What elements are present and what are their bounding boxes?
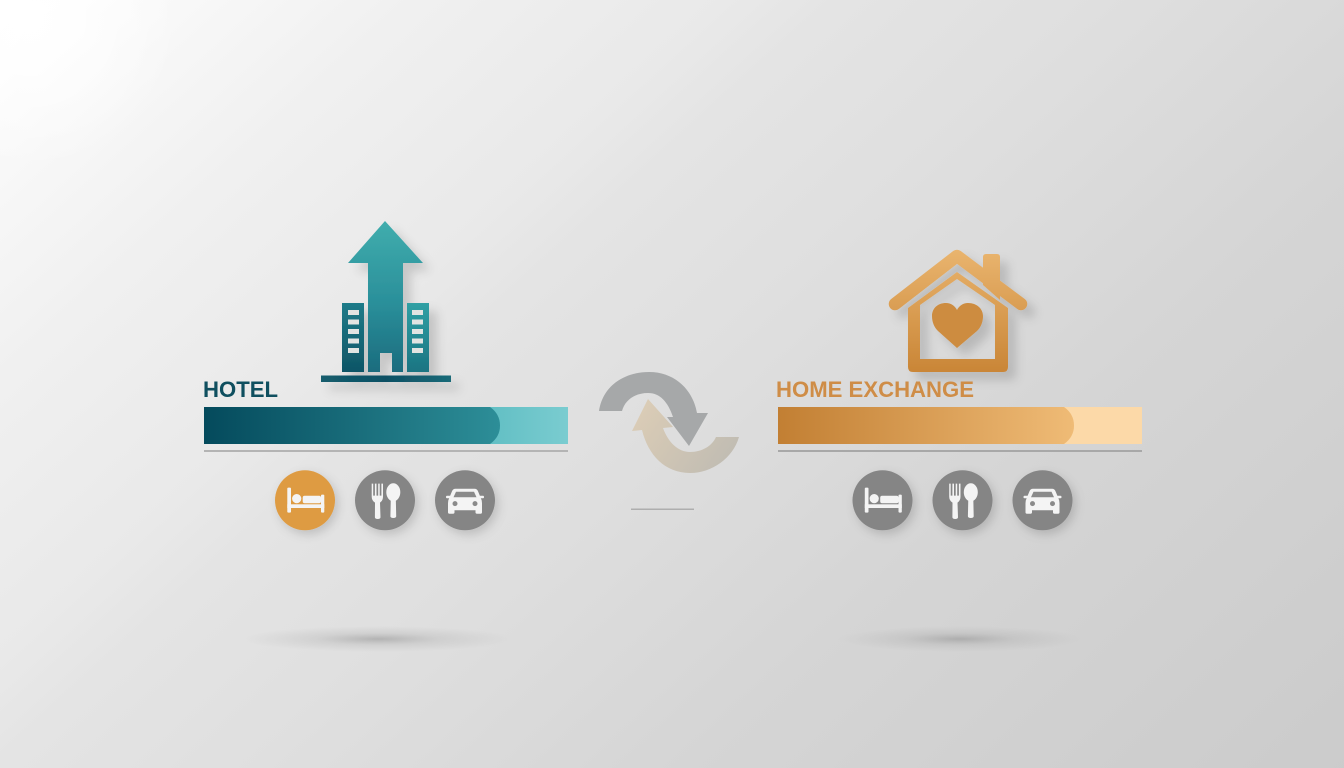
icon part: left building xyxy=(342,303,364,372)
icon: car xyxy=(1012,470,1072,530)
divider: hotel xyxy=(204,450,568,452)
divider: home exchange xyxy=(778,450,1142,452)
heading: home exchange: HOME EXCHANGE xyxy=(776,377,974,402)
icons: home exchange services xyxy=(852,470,1072,530)
icon: house with heart xyxy=(895,254,1021,372)
icon: fork and spoon xyxy=(932,470,992,530)
panel: hotel xyxy=(203,221,568,530)
bar: hotel xyxy=(204,407,568,444)
icon: car xyxy=(435,470,495,530)
ground shadow: home exchange xyxy=(838,626,1082,652)
icon: fork and spoon xyxy=(355,470,415,530)
exchange arrows xyxy=(599,372,739,473)
icons: hotel services xyxy=(275,470,495,530)
bar: home exchange xyxy=(778,407,1142,444)
icon: hotel building with up arrow xyxy=(321,221,451,382)
icon part: right building xyxy=(407,303,429,372)
ground shadow: hotel xyxy=(243,626,513,652)
icon part: walls xyxy=(908,272,1008,372)
arrow: grey clockwise xyxy=(599,372,708,446)
icon part: heart xyxy=(932,303,983,348)
icon part: base xyxy=(321,376,451,382)
heading: hotel: HOTEL xyxy=(203,377,278,402)
divider: centre xyxy=(631,508,694,510)
icon: bed (highlighted) xyxy=(275,470,335,530)
icon part: roof xyxy=(895,256,1021,304)
arrow: tan counter-clockwise xyxy=(632,399,739,473)
panel: home exchange xyxy=(776,254,1142,530)
icon: bed xyxy=(852,470,912,530)
icon part: arrow tower xyxy=(348,221,423,372)
icon part: chimney xyxy=(983,254,1000,300)
